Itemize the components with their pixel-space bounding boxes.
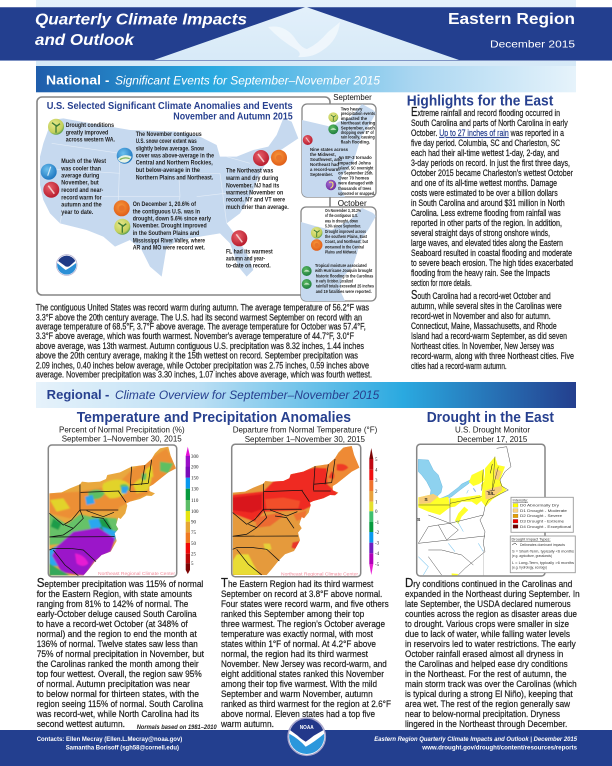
text: record warm states: Nine states across xyxy=(310,147,349,152)
text block: drought overview: in the Northeast. For the rest of autumn, the xyxy=(405,669,567,679)
text block: drought overview: area wet. The rest of the region generally saw xyxy=(405,699,570,709)
icon: drought improved WA xyxy=(48,119,64,135)
legend: temperature colour bar: 0 xyxy=(375,510,378,515)
rivers xyxy=(418,490,483,575)
text block: precipitation overview: top four wettest. Overall, the region saw 95% xyxy=(37,669,202,679)
footer bar xyxy=(0,730,612,766)
panel: October events xyxy=(301,207,376,301)
region and date: December 2015 xyxy=(490,40,576,50)
text: tornado: uprooted or snapped. xyxy=(338,191,375,196)
panel: September events xyxy=(302,104,376,197)
text block: temperature overview xyxy=(220,575,391,729)
text block: highlights: record-wet in November and also for autumn. xyxy=(411,311,551,321)
text block: temperature overview: temperature was exactly normal, with most xyxy=(221,629,373,639)
text block: highlights: flooding from the heavy rain. See the Impacts xyxy=(411,268,550,278)
legend: precipitation colour bar: 200 xyxy=(191,466,199,470)
text block: drought overview: due to lack of water, while falling water levels xyxy=(405,629,570,639)
text: tornado: Over 70 homes xyxy=(338,176,370,181)
text block: precipitation overview: early-October deluge caused South Carolina xyxy=(37,609,197,619)
icon: precipitation xyxy=(328,112,338,122)
chart title: drought monitor xyxy=(455,424,530,444)
text: Florida: autumn and year- xyxy=(226,257,265,263)
chart title: temperature: Departure from Normal Temperature (°F) xyxy=(233,424,377,434)
legend: temperature colour bar: -1 xyxy=(375,521,380,526)
icon: NOAA logo footer xyxy=(288,718,325,755)
legend: drought intensity: D1 Drought - Moderate xyxy=(520,508,567,513)
text: West: Much of the West xyxy=(61,159,106,165)
text block: temperature overview: among their top five warmest. With the mild xyxy=(221,679,377,689)
text block: national summary: 2.09 inches, 0.40 inches below average, while October precipitation was 2.75 inches, 0.59 inches above xyxy=(36,360,369,370)
report reference: www.drought.gov/drought/content/resources/reports xyxy=(421,744,577,751)
text: drought WA: Drought conditions xyxy=(66,123,115,129)
report title xyxy=(35,12,247,49)
icon: NOAA logo footer: NOAA xyxy=(300,725,314,731)
legend: drought intensity: D0 Abnormally Dry xyxy=(520,503,559,508)
text: tornado: thousands of trees xyxy=(338,186,372,191)
icon: warm Florida xyxy=(231,230,247,246)
text: West: November, but xyxy=(61,181,99,187)
text: Northeast: warmest November on xyxy=(225,191,284,197)
text: Florida xyxy=(226,249,273,270)
icon: hurricane moisture xyxy=(302,266,312,276)
map: percent of normal precipitation: Northeast Regional Climate Center xyxy=(98,571,175,577)
text: snow cover: U.S. snow cover extent was xyxy=(136,139,197,145)
text: drought change: Plains and Midwest. xyxy=(325,250,357,255)
text: West: average during xyxy=(61,173,100,179)
chart title: temperature xyxy=(233,424,377,444)
text block: national summary xyxy=(36,303,372,380)
map: departure from normal temperature: Northeast Regional Climate Center xyxy=(281,572,358,578)
regional section bar xyxy=(36,382,576,408)
icon: warm Northeast xyxy=(253,150,269,166)
text: December drought: AR and MO were record wet. xyxy=(133,246,205,252)
text block: temperature overview: warm autumn. xyxy=(220,719,274,729)
text: record warm states: Northeast had xyxy=(310,162,339,167)
text: snow cover: but below-average in the xyxy=(136,168,201,174)
text block: drought overview: Dry conditions continued in the Carolinas and xyxy=(405,575,572,590)
text: heavy precipitation: flash flooding. xyxy=(341,139,370,144)
contacts: Samantha Borisoff (sgh58@cornell.edu) xyxy=(66,744,179,751)
icon: drought improved xyxy=(311,227,322,238)
text block: drought overview: to drought. Various crops were smaller in size xyxy=(405,619,569,629)
text block: drought overview: in reservoirs led to water restrictions. The early xyxy=(405,639,576,649)
text: Northeast: much drier than average. xyxy=(226,205,289,211)
text block: highlights: in South Carolina and around $31 million in North xyxy=(411,198,565,208)
text block: temperature overview: three warmest. The region's October average xyxy=(221,619,385,629)
text: Hurricane Joaquin: rainfall totals exceeded 25 inches xyxy=(316,283,375,288)
text: Hurricane Joaquin: in early October. Localized xyxy=(316,278,353,283)
legend: temperature colour bar: 4 xyxy=(375,468,378,474)
text block: precipitation overview: for the Eastern Region, with state amounts xyxy=(37,589,192,599)
text: drought WA: greatly improved xyxy=(66,130,109,136)
map: percent of normal precipitation xyxy=(48,445,178,577)
panel title xyxy=(47,101,293,122)
text: record warm states: September. xyxy=(310,172,333,177)
legend: precipitation colour bar: 90 xyxy=(191,520,196,526)
legend: precipitation colour bar: 130 xyxy=(191,488,199,492)
text block: highlights: South Carolina had a record-wet October and xyxy=(411,287,551,302)
text: tornado: An EF-3 tornado xyxy=(338,155,372,160)
text block: national summary: above average, was 13th warmest. Autumn contiguous U.S. precipitation was 8.32 inches, 1.44 inches xyxy=(36,341,364,351)
text block: highlights: costs were estimated to be over a billion dollars xyxy=(411,188,558,198)
text block: precipitation overview: the Carolinas ranked the month among their xyxy=(37,659,199,669)
header band xyxy=(0,0,612,66)
heading: Highlights for the East: Highlights for the East xyxy=(407,92,553,110)
text block: highlights: October. Up to 27 inches of rain was reported in a xyxy=(411,128,565,138)
text block: precipitation overview: 75% of normal precipitation in November, but xyxy=(37,649,204,659)
text: West xyxy=(60,159,106,216)
legend: drought impact types: Delineates dominant impacts xyxy=(520,542,565,547)
text: tornado: impacted Johns xyxy=(338,160,372,165)
text block: highlights: cities had a record-warm autumn. xyxy=(411,361,507,371)
icon: record warm xyxy=(303,135,313,145)
text block: national summary: average temperature of 68.5°F, 3.7°F above average. The average temperature for October was 57.4°F, xyxy=(36,322,366,332)
text: heavy precipitation xyxy=(341,106,376,144)
text block: highlights: five day period. Columbia, SC and Charleston, SC xyxy=(411,138,560,148)
text block: precipitation overview: region seeing 115% of normal. South Carolina xyxy=(37,699,204,709)
map: drought monitor: S xyxy=(424,497,428,503)
text: Northeast: warm and dry during xyxy=(225,176,279,182)
text block: temperature overview: September and warm November, autumn xyxy=(221,689,373,699)
text: December drought: in the Southern Plains and xyxy=(133,231,200,237)
text: drought change: 5.3% since September. xyxy=(325,224,361,229)
text: tornado: on September 25th. xyxy=(338,170,373,176)
text: Florida: to-date on record. xyxy=(226,264,271,270)
map: drought monitor: S/L xyxy=(488,491,495,496)
text block: precipitation overview: to have a record-wet October (at 348% of xyxy=(37,619,188,629)
text block: temperature overview: ranked this September among their top xyxy=(221,609,364,619)
legend: temperature colour bar: 3 xyxy=(375,479,378,484)
text: West: record and near- xyxy=(61,188,103,194)
text: December drought: On December 1, 20.6% of xyxy=(133,202,197,208)
text: Hurricane Joaquin: Tropical moisture associated xyxy=(315,263,367,268)
text block: drought overview: is typical during a strong El Niño), keeping that xyxy=(405,689,573,699)
panel title: U.S. Selected Significant Climate Anomalies and Events xyxy=(47,101,293,112)
text: Florida: FL had its warmest xyxy=(226,249,273,255)
legend: drought intensity: D3 Drought - Extreme xyxy=(520,518,564,524)
text: drought change: Coast, and Northeast; but xyxy=(325,239,368,244)
icon: tornado xyxy=(326,180,336,190)
contacts xyxy=(37,736,182,751)
national section bar: Significant Events for September–November 2015 xyxy=(115,74,380,88)
chart title: drought monitor: December 17, 2015 xyxy=(457,434,528,444)
chart title: precipitation xyxy=(59,424,185,444)
note: normals: Normals based on 1981–2010 xyxy=(137,724,217,731)
text block: highlights: several straight days of strong onshore winds, xyxy=(411,228,550,238)
text block: national summary: 3.3°F above the 20th century average. The U.S. had its second warmest September on record with an xyxy=(36,313,362,323)
regional section bar: - xyxy=(105,387,109,402)
text block: precipitation overview xyxy=(36,575,204,729)
text block: highlights: section for more details. xyxy=(411,278,472,288)
text: snow cover: cover was above-average in the xyxy=(136,154,215,160)
legend: drought intensity: Intensity: xyxy=(512,498,528,503)
icon: warm West xyxy=(43,182,59,198)
legend: temperature colour bar: -2 xyxy=(375,531,380,536)
region and date xyxy=(448,11,576,50)
text: Northeast xyxy=(225,168,289,211)
legend: precipitation colour bar: 100 xyxy=(191,510,199,515)
text: snow cover: slightly below average. Snow xyxy=(136,146,204,152)
text: snow cover: Central and Northern Rockies, xyxy=(136,161,213,167)
legend: drought impact types: S = Short-Term, typically <6 months xyxy=(512,548,574,554)
state lines and coast xyxy=(418,447,511,575)
text: Hurricane Joaquin: historic flooding to the Carolinas xyxy=(316,273,374,278)
text: drought WA: across western WA. xyxy=(66,137,115,143)
text: drought change: of the contiguous U.S. xyxy=(325,213,358,218)
text: Hurricane Joaquin xyxy=(314,263,375,294)
national section bar xyxy=(36,66,576,92)
national section bar: National xyxy=(46,72,101,88)
text: heavy precipitation: Northeast during xyxy=(341,121,376,126)
legend: temperature colour bar: 2 xyxy=(375,490,378,495)
legend: precipitation colour bar xyxy=(186,447,199,574)
text block: temperature overview: states within 1°F of normal. At 4.2°F above xyxy=(221,639,376,649)
text: heavy precipitation: precipitation events xyxy=(341,111,376,116)
national section bar: - xyxy=(105,72,109,88)
text block: precipitation overview: of normal. Autumn precipitation was near xyxy=(37,679,190,689)
contacts: Contacts: Ellen Mecray (Ellen.L.Mecray@noaa.gov) xyxy=(37,736,182,743)
text: West: year to date. xyxy=(61,210,94,216)
legend: precipitation colour bar: 50 xyxy=(191,542,196,547)
U.S. base map xyxy=(37,118,298,277)
text block: temperature overview: Four states were record warm, and five others xyxy=(221,599,389,609)
text: heavy precipitation: rain locally, causing xyxy=(341,135,375,140)
icon: snow xyxy=(117,148,133,164)
text: December drought xyxy=(133,202,212,252)
text: record warm states: the Midwest, xyxy=(310,152,336,157)
text: tornado: were damaged with xyxy=(337,181,374,186)
text block: precipitation overview: to below normal for thirteen states, with the xyxy=(37,689,199,699)
text: snow cover: Northern Plains and Northeast. xyxy=(136,175,214,181)
text block: precipitation overview: was record-wet, while North Carolina had its xyxy=(36,709,199,719)
icon: flooding xyxy=(328,124,338,134)
text: snow cover xyxy=(136,132,215,181)
text: West: autumn and the xyxy=(61,203,102,209)
map: September northeast US xyxy=(302,104,376,197)
icon: flooding xyxy=(302,279,312,289)
text block: drought overview: counties across the region as disaster areas due xyxy=(405,609,577,619)
text: Northeast: November. NJ had its xyxy=(226,183,280,189)
text block: highlights xyxy=(411,104,574,371)
text: West: was cooler than xyxy=(60,166,101,172)
text block: highlights: Northeast cities. In November, New Jersey was xyxy=(411,341,554,351)
report title: and Outlook xyxy=(35,32,135,49)
panel title: November and Autumn 2015 xyxy=(173,112,293,122)
text block: drought overview: near to below-normal precipitation. Dryness xyxy=(405,709,560,719)
text block: highlights: autumn, while several sites in the Carolinas were xyxy=(411,301,562,311)
legend: temperature colour bar: 5 xyxy=(375,458,378,463)
region and date: Eastern Region xyxy=(448,11,575,28)
text: December drought: the contiguous U.S. was in xyxy=(133,209,200,215)
legend: precipitation colour bar: 110 xyxy=(191,499,199,504)
text block: drought overview: late September, the USDA declared numerous xyxy=(405,599,571,609)
text: drought change: was in drought, down xyxy=(324,218,358,223)
legend: precipitation colour bar: 25 xyxy=(191,552,196,558)
legend: drought impact types: (e.g. agriculture, grasslands) xyxy=(512,553,553,558)
watermark bird xyxy=(268,22,340,57)
text: heavy precipitation: impacted the xyxy=(341,116,368,121)
legend: drought impact types: Drought Impact Types: xyxy=(512,536,551,541)
text block: highlights: and one of its all-time wettest months. Damage xyxy=(411,178,557,188)
icon: dry Northeast xyxy=(271,150,287,166)
text: tornado: Island, SC overnight xyxy=(338,165,374,170)
text: tornado xyxy=(337,155,375,196)
icon: NOAA logo small xyxy=(56,255,77,275)
text: record warm states xyxy=(310,147,349,177)
legend: temperature colour bar: -5 xyxy=(375,563,380,568)
map: drought monitor xyxy=(417,444,575,577)
text block: drought overview: October rainfall erased almost all dryness in xyxy=(405,649,563,659)
text block: highlights: each had their all-time wettest 1-day, 2-day, and xyxy=(411,148,559,158)
text block: precipitation overview: ranging from 81% to 142% of normal. The xyxy=(37,599,188,609)
text: December drought: Mississippi River Valley, where xyxy=(133,238,206,244)
icon: drought worsened xyxy=(311,239,322,251)
text block: highlights: reported in other parts of the region. In addition, xyxy=(411,218,562,228)
text block: drought overview: expanded in the Northeast during September. In xyxy=(405,589,580,599)
text: drought change: worsened in the Central xyxy=(324,244,364,249)
text: record warm states: a record-warm xyxy=(310,167,340,172)
text block: drought overview: main storm track was over the Carolinas (which xyxy=(405,679,577,689)
text block: drought overview xyxy=(405,575,580,729)
chart title: drought monitor: U.S. Drought Monitor xyxy=(455,424,530,434)
header dark bar with triangle cut-out xyxy=(0,7,612,60)
text block: precipitation overview: second wettest autumn. xyxy=(37,719,125,729)
icon: cool West xyxy=(41,164,57,180)
legend: drought impact types: L = Long-Term, typically >6 months xyxy=(512,560,574,565)
legend: drought intensity: D4 Drought - Exceptional xyxy=(520,524,571,529)
legend: precipitation colour bar: 300 xyxy=(191,455,199,460)
heading: Temperature and Precipitation Anomalies: Temperature and Precipitation Anomalies xyxy=(77,410,351,426)
report reference: Eastern Region Quarterly Climate Impacts and Outlook | December 2015 xyxy=(374,736,577,743)
icon: drought improved plains xyxy=(114,219,130,235)
text block: temperature overview: eight additional states ranked this November xyxy=(221,669,384,679)
text block: highlights: Carolina. Less extreme flooding from rainfall was xyxy=(411,208,561,218)
text block: temperature overview: above normal. Eleven states had a top five xyxy=(221,709,375,719)
label: October: October xyxy=(338,198,367,208)
map: departure from normal temperature xyxy=(232,444,362,578)
panel: U.S. climate anomalies map xyxy=(37,97,330,295)
text block: temperature overview: ranked as third warmest for the region at 2.6°F xyxy=(221,699,391,709)
text: drought change: On November 3, 20.2% xyxy=(325,208,361,213)
lakes xyxy=(418,459,470,502)
text block: highlights: large waves, and elevated tides along the Eastern xyxy=(411,238,563,248)
text: West: record warm for xyxy=(61,195,102,201)
legend: precipitation colour bar: 5 xyxy=(191,562,194,567)
text: Northeast: record. NY and VT were xyxy=(226,198,286,204)
text block: precipitation overview: September precipitation was 115% of normal xyxy=(37,575,203,590)
text: snow cover: The November contiguous xyxy=(136,132,202,138)
report reference xyxy=(374,736,577,751)
text: drought change xyxy=(324,208,368,255)
text block: national summary: above the 20th century average, making it the 15th wettest on record. September precipitation was xyxy=(36,351,358,361)
drought areas xyxy=(418,457,507,515)
regional section bar: Regional xyxy=(47,387,102,402)
heading: Drought in the East: Drought in the East xyxy=(427,410,554,426)
panel frame xyxy=(37,97,330,295)
text block: drought overview: lingered in the Northeast through December. xyxy=(405,719,567,729)
text: drought WA xyxy=(66,123,115,143)
legend: drought impact types: (e.g. hydrology, ecology) xyxy=(512,565,548,570)
chart title: precipitation: Percent of Normal Precipitation (%) xyxy=(59,424,185,434)
text: drought change: Drought improved across xyxy=(325,229,366,234)
legend: temperature colour bar: 1 xyxy=(375,500,378,506)
text block: temperature overview: The Eastern Region had its third warmest xyxy=(221,575,374,590)
text block: precipitation overview: 136% of normal. Twelve states saw less than xyxy=(37,639,198,649)
regional section bar: Climate Overview for September–November 2015 xyxy=(115,388,380,402)
legend: drought intensity: D2 Drought - Severe xyxy=(520,513,562,518)
map: drought monitor: S xyxy=(417,517,421,523)
text block: highlights: Connecticut, Maine, Massachusetts, and Rhode xyxy=(411,321,557,331)
map: October eastern US xyxy=(301,208,376,301)
icon: drought area xyxy=(114,200,130,216)
text block: temperature overview: normal, the region had its third warmest xyxy=(221,649,368,659)
report title: Quarterly Climate Impacts xyxy=(35,12,247,28)
text: December drought: drought, down 5.6% since early xyxy=(133,216,212,222)
legend: temperature colour bar xyxy=(369,448,380,575)
text block: highlights: Extreme rainfall and record flooding occurred in xyxy=(411,104,560,119)
legend: drought impact types xyxy=(510,536,575,573)
text block: temperature overview: November. New Jersey was record-warm, and xyxy=(221,659,387,669)
text: record warm states: Southwest, and xyxy=(310,157,342,162)
chart title: temperature: September 1–November 30, 2015 xyxy=(245,434,365,444)
legend: precipitation colour bar: 75 xyxy=(191,531,196,536)
text: Hurricane Joaquin: with Hurricane Joaquin brought xyxy=(314,268,373,273)
text: drought change: the southern Plains, East xyxy=(325,234,367,239)
text: heavy precipitation: September, each xyxy=(341,125,375,130)
text block: temperature overview: September on record at 3.8°F above normal. xyxy=(221,589,382,599)
text: heavy precipitation: Two heavy xyxy=(341,106,363,112)
legend: precipitation colour bar: 150 xyxy=(191,476,199,482)
text block: drought overview: the Carolinas and helped ease dry conditions xyxy=(405,659,568,669)
text: Northeast: The Northeast was xyxy=(226,168,274,174)
text block: precipitation overview: normal) and the region to end the month at xyxy=(37,629,197,639)
text: Hurricane Joaquin: and 19 fatalities were reported. xyxy=(316,289,372,294)
label: September: September xyxy=(333,92,372,102)
text: heavy precipitation: dropping over 8" of xyxy=(341,130,374,135)
legend: temperature colour bar: -4 xyxy=(375,552,380,557)
text block: national summary: average. November precipitation was 3.30 inches, 1.07 inches above average, which was fourth wettest. xyxy=(36,370,372,380)
text block: national summary: 3.3°F above average, which was fourth warmest. November's average temperature of 44.7°F, 3.0°F xyxy=(36,331,354,341)
text: December drought: November. Drought improved xyxy=(133,224,207,230)
text block: national summary: The contiguous United States was record warm during autumn. The average temperature of 56.2°F was xyxy=(36,303,369,313)
chart title: precipitation: September 1–November 30, 2015 xyxy=(62,434,182,444)
legend: drought intensity xyxy=(511,497,573,532)
legend: temperature colour bar: -3 xyxy=(375,542,380,546)
